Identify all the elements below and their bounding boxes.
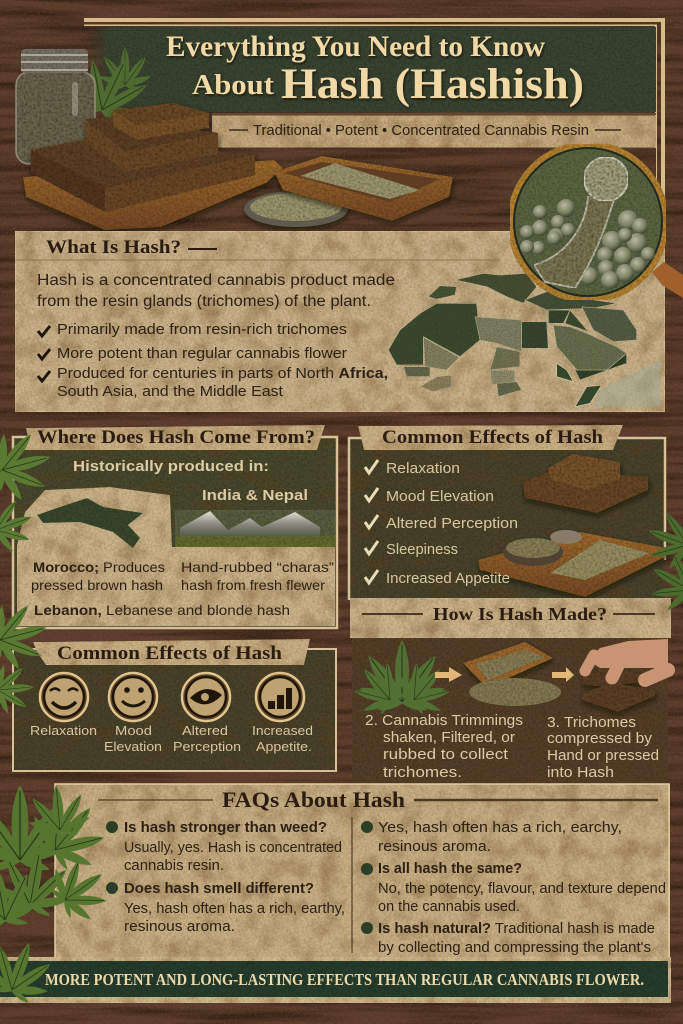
- intro text: Hash is a concentrated cannabis product made: [37, 272, 395, 289]
- map of Morocco: [37, 498, 143, 548]
- panel background: [55, 784, 670, 960]
- left FAQ column: Usually, yes. Hash is concentrated: [124, 839, 342, 856]
- step descriptions: Hand or pressed: [547, 747, 659, 764]
- effect labels: Elevation: [104, 739, 162, 754]
- effect labels: Mood: [115, 723, 152, 738]
- magnifier handle: [652, 262, 683, 298]
- step descriptions: trichomes.: [383, 764, 462, 781]
- region descriptions: Morocco; Produces: [33, 559, 165, 575]
- header panel: [0, 18, 665, 236]
- left FAQ column: cannabis resin.: [124, 857, 224, 874]
- step descriptions: rubbed to collect: [383, 746, 509, 763]
- step descriptions: 3. Trichomes: [547, 714, 636, 731]
- heading: What Is Hash?: [46, 237, 181, 258]
- left FAQ column: resinous aroma.: [124, 918, 235, 935]
- bullet list: [38, 322, 388, 400]
- effect labels: Altered: [182, 723, 228, 738]
- arrow: tray to press: [552, 667, 574, 682]
- magnifier inner shadow ring: [514, 148, 662, 296]
- step descriptions: 2. Cannabis Trimmings: [365, 712, 523, 729]
- icon: plant behind jar: [62, 44, 161, 135]
- bullet list: South Asia, and the Middle East: [57, 384, 283, 400]
- panel frame: [13, 437, 337, 628]
- right FAQ column: resinous aroma.: [378, 838, 491, 855]
- checklist: [365, 460, 518, 587]
- effect labels: Relaxation: [30, 723, 97, 738]
- panel body: [349, 437, 665, 599]
- panel: common effects icons: [12, 639, 337, 772]
- checklist: Mood Elevation: [386, 489, 494, 505]
- heading: FAQs About Hash: [222, 787, 405, 812]
- icon: pile of trichomes: [469, 678, 561, 706]
- checklist: Relaxation: [386, 461, 460, 477]
- arrow: plant to tray: [435, 667, 462, 682]
- effect labels: Appetite.: [256, 739, 312, 754]
- column divider: [351, 817, 353, 953]
- region descriptions: pressed brown hash: [31, 577, 163, 593]
- heading ribbon: [358, 425, 623, 450]
- panel body: [12, 648, 337, 772]
- left FAQ column: Is hash stronger than weed?: [124, 819, 327, 836]
- region label: India and Nepal: India & Nepal: [202, 487, 308, 504]
- icon: wooden dish of kief: [274, 156, 453, 221]
- panel outline: [55, 784, 669, 960]
- step descriptions: shaken, Filtered, or: [383, 729, 515, 746]
- panel: how is hash made: [343, 598, 671, 784]
- icon: rising bars: [256, 673, 304, 721]
- region descriptions: [31, 559, 334, 618]
- heading rules: [98, 799, 213, 801]
- right FAQ column: Is all hash the same?: [378, 860, 522, 877]
- icon: left cannabis leaves: [0, 423, 59, 716]
- panel: FAQs: [55, 784, 670, 960]
- tagline strip: [212, 113, 656, 148]
- heading dash: [188, 248, 217, 250]
- heading band: How Is Hash Made?: [433, 604, 607, 624]
- panel body: [12, 437, 338, 629]
- panel: where does hash come from: [12, 425, 338, 629]
- icon: hash blocks: [582, 665, 655, 712]
- checklist: Altered Perception: [386, 516, 518, 532]
- header frame: [84, 18, 665, 236]
- trichome heads: [520, 199, 655, 289]
- icon: glass jar: [16, 49, 95, 164]
- checklist: Increased Appetite: [386, 571, 510, 587]
- intro text: [37, 272, 395, 310]
- icon: large cannabis plant lower left: [0, 782, 120, 1011]
- step descriptions: compressed by: [547, 730, 653, 747]
- right FAQ column: by collecting and compressing the plant's: [378, 939, 651, 956]
- icon: wooden tray with stacked hash blocks: [23, 103, 283, 230]
- icon: tray of trimmings: [463, 642, 553, 688]
- heading ribbon: Common Effects of Hash: [57, 644, 283, 664]
- right FAQ column: on the cannabis used.: [378, 898, 520, 915]
- right FAQ column: Yes, hash often has a rich, earchy,: [378, 819, 622, 836]
- checklist: Sleepiness: [386, 542, 458, 558]
- region descriptions: Hand-rubbed “charas”: [181, 559, 334, 575]
- left FAQ column: [106, 819, 345, 935]
- icon: plate of kief: [244, 191, 348, 227]
- region descriptions: hash from fresh flewer: [181, 577, 325, 593]
- heading band: [350, 598, 671, 638]
- panel frame: [13, 649, 336, 771]
- step descriptions: [365, 712, 659, 781]
- right FAQ column: [361, 819, 666, 956]
- right FAQ column: Is hash natural? Traditional hash is made: [378, 920, 655, 937]
- icon: eye: [182, 673, 230, 721]
- panel background: [15, 231, 665, 412]
- panel: common effects checklist: [349, 425, 667, 600]
- left FAQ column: Yes, hash often has a rich, earthy,: [124, 900, 345, 917]
- icon: hand: [585, 639, 668, 680]
- subheading: Historically produced in:: [73, 458, 269, 475]
- effect labels: Increased: [252, 723, 313, 738]
- title: About: [192, 70, 275, 101]
- header rule: [17, 259, 500, 261]
- title: Hash (Hashish): [281, 61, 584, 108]
- process image background: [352, 638, 668, 784]
- footer banner: [0, 957, 671, 1003]
- icon: magnifying glass with trichomes: [510, 144, 683, 300]
- right FAQ column: No, the potency, flavour, and texture depend: [378, 880, 666, 897]
- title background: [80, 27, 656, 112]
- lower wooden table band: [0, 148, 656, 232]
- icon: stacked hash: [523, 454, 648, 513]
- bullet list: Produced for centuries in parts of North Africa,: [57, 366, 388, 382]
- glandular trichome head: [584, 157, 628, 201]
- panel: what is hash: [15, 231, 665, 412]
- left FAQ column: Does hash smell different?: [124, 880, 314, 897]
- glandular trichome stalk: [534, 196, 615, 288]
- effect labels: Perception: [173, 739, 241, 754]
- lower paper section: [17, 487, 335, 626]
- icon: tray with kief: [478, 530, 667, 597]
- icon: right side cannabis leaves: [638, 503, 683, 620]
- heading ribbon: Common Effects of Hash: [382, 428, 604, 448]
- title: [166, 30, 584, 108]
- effect labels: [30, 723, 313, 754]
- icon: cannabis plant: [343, 640, 461, 724]
- title: Everything You Need to Know: [166, 30, 545, 63]
- region descriptions: Lebanon, Lebanese and blonde hash: [34, 602, 290, 618]
- step descriptions: into Hash: [547, 764, 614, 781]
- bullet list: More potent than regular cannabis flower: [57, 346, 347, 362]
- map: North Africa, Middle East and South Asia: [388, 273, 660, 407]
- magnifier lens: [510, 144, 666, 300]
- heading ribbon: Where Does Hash Come From?: [37, 427, 315, 448]
- tagline strip: Traditional • Potent • Concentrated Cannabis Resin: [253, 122, 589, 139]
- icon: smiling face: [109, 673, 157, 721]
- panel frame: [349, 438, 665, 600]
- icon: relaxed face: [40, 673, 88, 721]
- intro text: from the resin glands (trichomes) of the plant.: [37, 293, 371, 310]
- heading ribbon: [33, 639, 310, 665]
- bullet list: Primarily made from resin-rich trichomes: [57, 322, 347, 338]
- mountain scene: [175, 510, 335, 547]
